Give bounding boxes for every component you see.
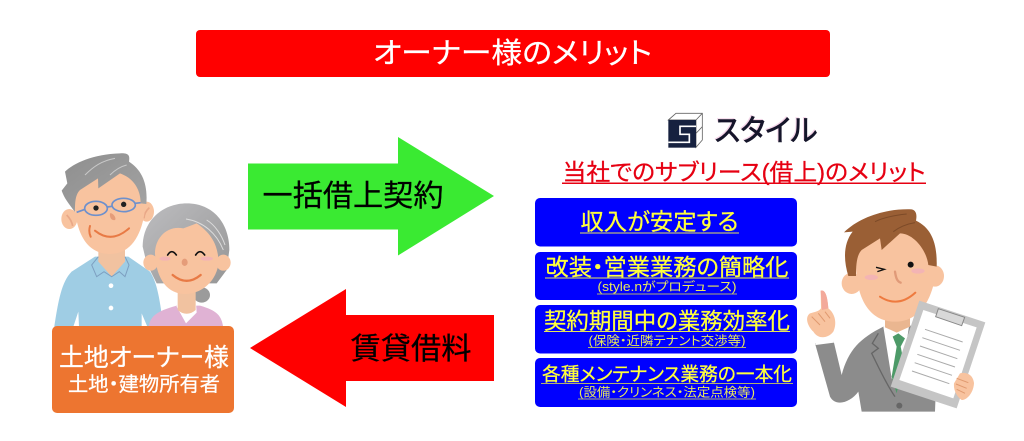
hand holding [954, 373, 974, 400]
arrow: master lease contract [248, 137, 494, 256]
merit: maintenance unification: (設備・クリンネス・法定点検等) [579, 384, 755, 400]
owner label box [52, 326, 234, 413]
arrow: rent [250, 289, 494, 407]
owner label box: 土地オーナー様 [59, 344, 229, 372]
merit: stable income [535, 198, 797, 246]
merit: renovation and sales: 改装・営業業務の簡略化 [546, 254, 788, 280]
icon: elderly owner couple [54, 153, 231, 328]
clipboard [891, 301, 985, 408]
owner label box: 土地・建物所有者 [68, 373, 220, 396]
woman [143, 203, 231, 328]
company logo [668, 113, 818, 148]
merit: contract period efficiency: 契約期間中の業務効率化 [544, 309, 790, 334]
merit: renovation and sales: (style.nがプロデュース) [598, 279, 736, 294]
icon: logo cube [668, 113, 702, 148]
merit: maintenance unification [535, 358, 797, 407]
suit [815, 325, 937, 412]
icon: businessman with clipboard [807, 209, 985, 412]
merit: stable income: 収入が安定する [580, 208, 738, 234]
neck [885, 317, 910, 333]
title banner [196, 30, 830, 77]
arrow: master lease contract: 一括借上契約 [262, 180, 444, 213]
arrow: rent: 賃貸借料 [350, 333, 472, 366]
merit: maintenance unification: 各種メンテナンス業務の一本化 [542, 364, 792, 386]
merit: contract period efficiency [535, 305, 797, 354]
title banner: オーナー様のメリット [373, 37, 652, 70]
subtitle: merits of sublease: 当社でのサブリース(借上)のメリット [562, 159, 926, 185]
merit: renovation and sales [535, 252, 797, 300]
merit: contract period efficiency: (保険・近隣テナント交渉等) [588, 333, 746, 348]
man [54, 153, 163, 328]
head [842, 273, 862, 294]
hand pointing [807, 290, 835, 337]
company logo: スタイル [714, 115, 818, 148]
